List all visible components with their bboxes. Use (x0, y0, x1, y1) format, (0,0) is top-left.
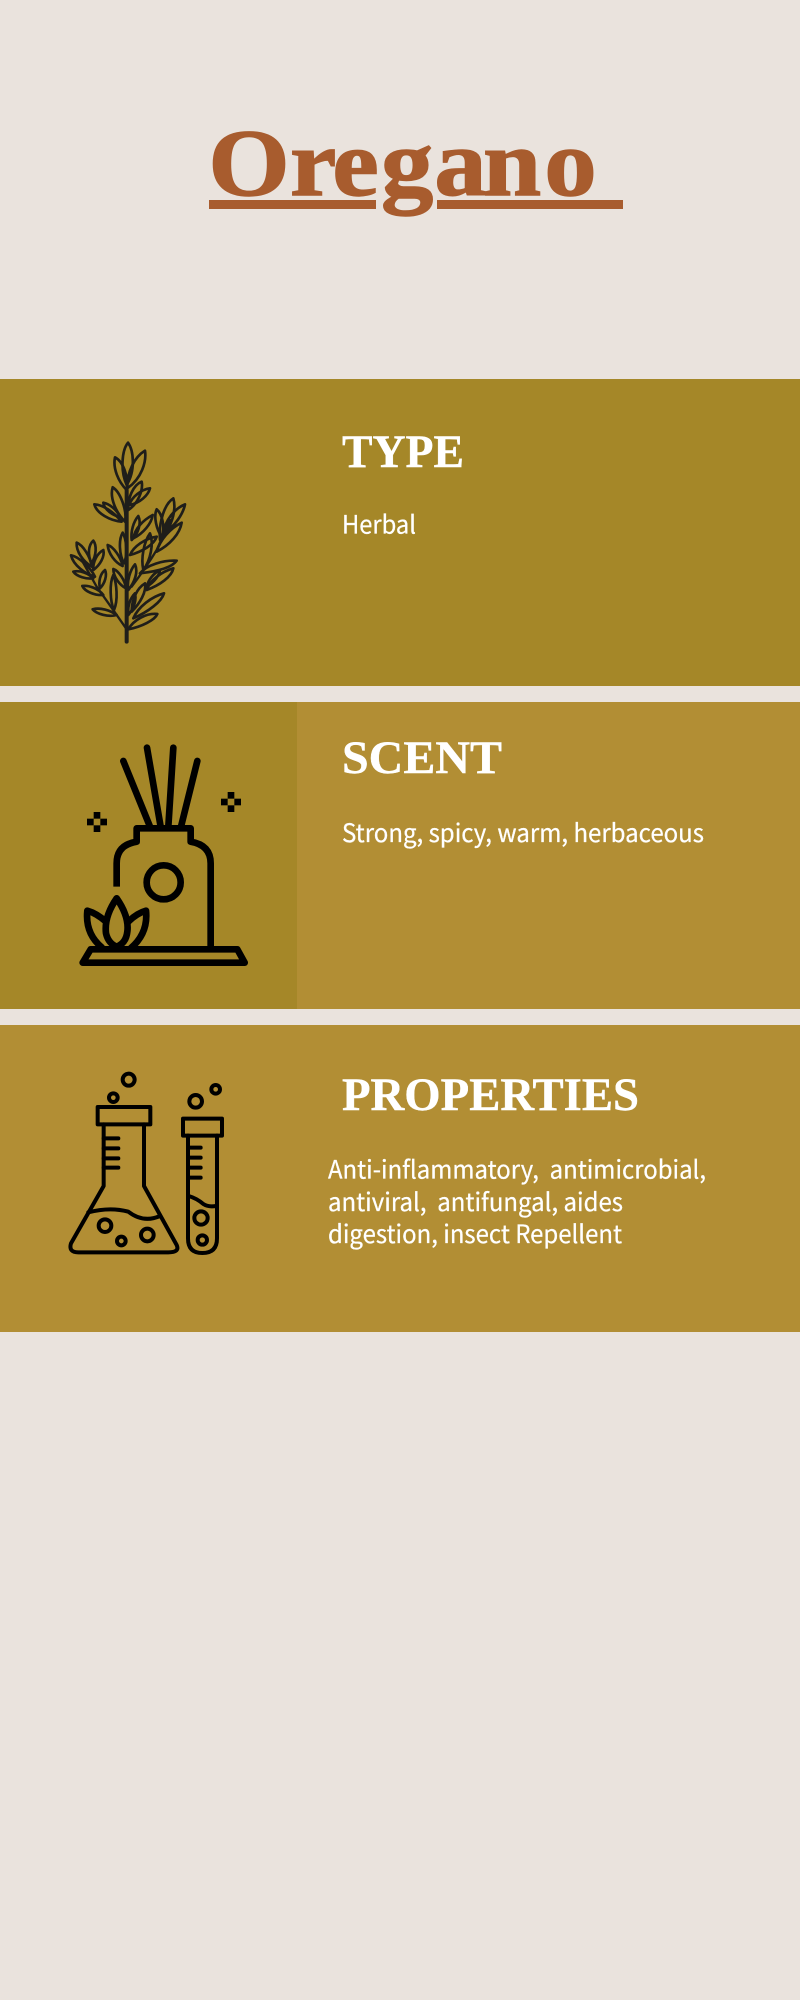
panel: properties (0, 1025, 800, 1332)
icon: lab flask and test tube (70, 1074, 222, 1253)
heading: type: TYPE (342, 426, 464, 478)
title: Oregano (208, 110, 597, 216)
text: scent description: Strong, spicy, warm, herbaceous (342, 814, 704, 850)
icon: reed diffuser (83, 748, 245, 963)
panel: scent (0, 702, 800, 1009)
text: properties description (328, 1150, 706, 1251)
text: properties description: digestion, insect Repellent (328, 1215, 623, 1251)
panel: type (0, 379, 800, 686)
text: properties description: Anti-inflammatory, antimicrobial, (328, 1150, 706, 1186)
icon: herb sprig (71, 443, 185, 642)
text: type value: Herbal (342, 506, 416, 542)
text: properties description: antiviral, antifungal, aides (328, 1183, 623, 1219)
heading: scent: SCENT (342, 732, 502, 784)
heading: properties: PROPERTIES (342, 1069, 639, 1121)
